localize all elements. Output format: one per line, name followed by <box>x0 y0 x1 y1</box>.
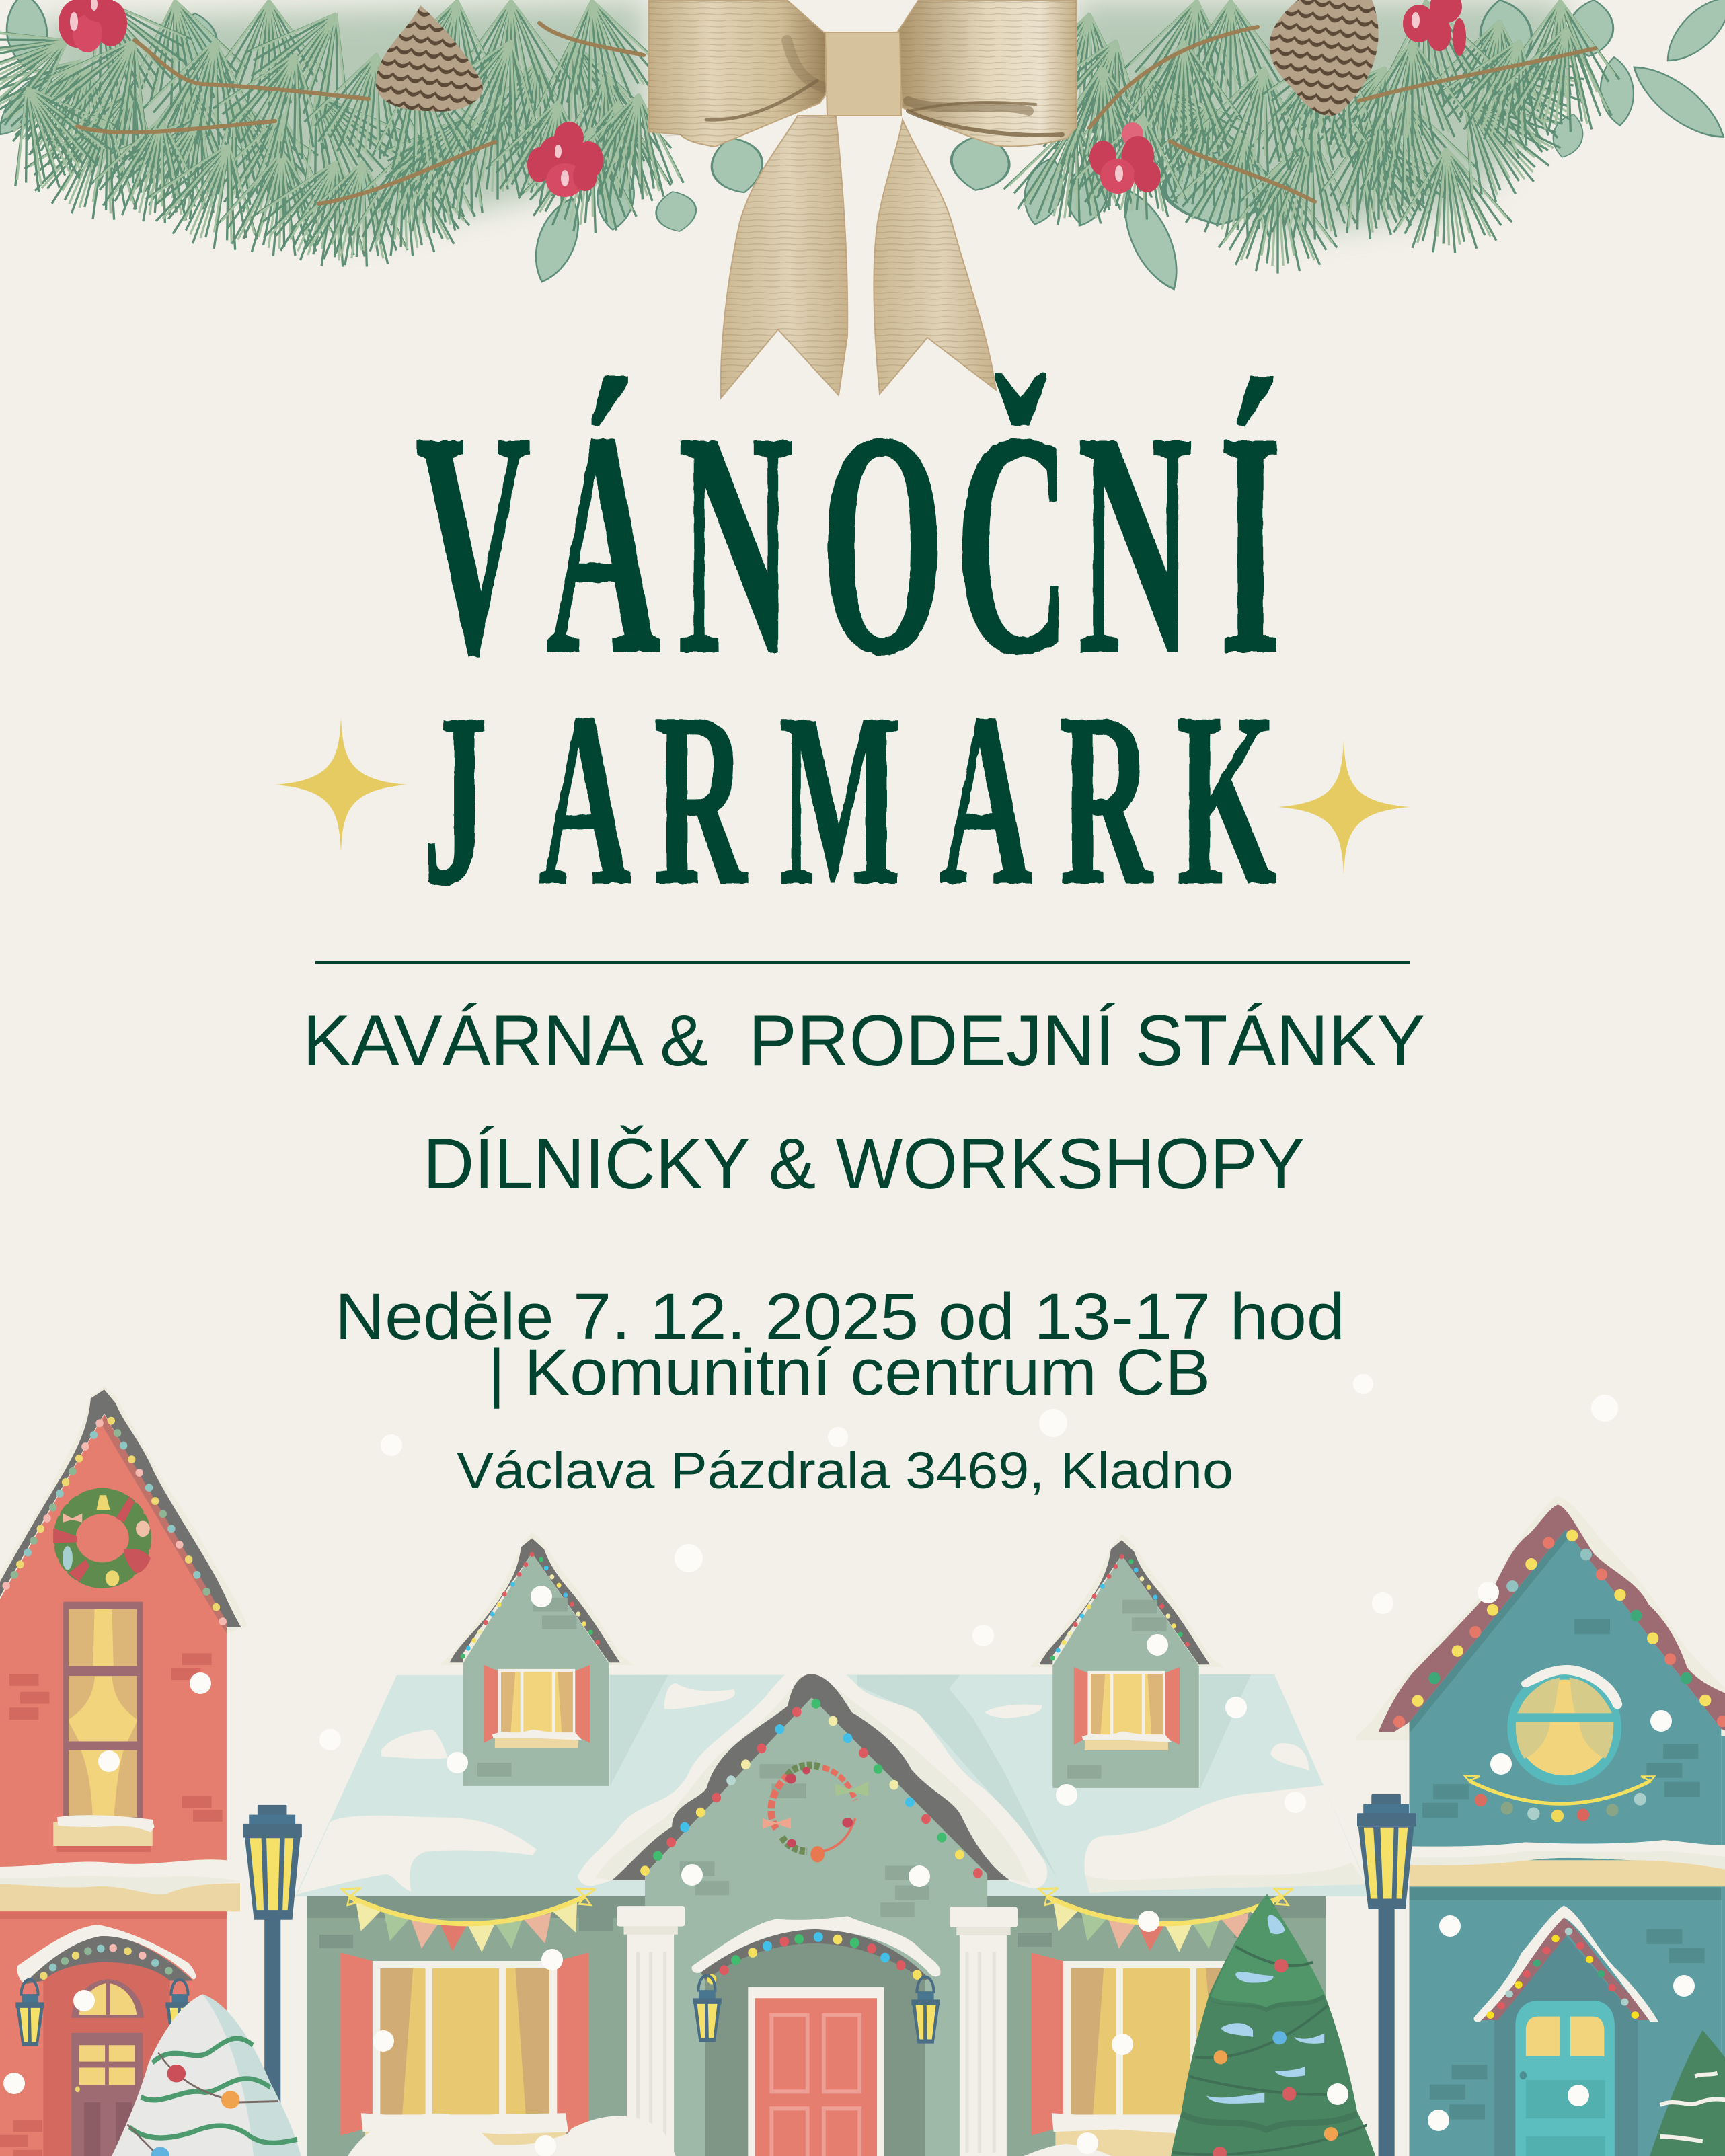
pine cone right <box>1270 0 1379 116</box>
teal door <box>1515 2001 1615 2156</box>
roof snow patches <box>297 1683 1367 1894</box>
subheading line 1: KAVÁRNA & PRODEJNÍ STÁNKY <box>303 1000 1425 1081</box>
ledge with snow <box>0 1859 242 1919</box>
red house <box>0 1386 247 2156</box>
wreath <box>53 1492 151 1586</box>
lantern on red house left <box>15 1980 44 2046</box>
lantern on red house right <box>165 1980 194 2046</box>
small christmas tree <box>1645 2030 1725 2156</box>
garland with bow <box>0 0 1725 398</box>
columns <box>617 1906 1018 2156</box>
porch lantern right <box>911 1977 940 2044</box>
gable grey roof band <box>612 1674 1009 1880</box>
window right <box>1031 1952 1279 2156</box>
dormer left <box>440 1532 634 1786</box>
falling snowflakes <box>3 1374 1695 2156</box>
porch roof band <box>701 1929 929 1980</box>
divider <box>315 961 1410 964</box>
round window <box>1512 1665 1622 1781</box>
entrance roof band <box>24 1935 193 1985</box>
bow tails <box>721 116 996 398</box>
dormer right <box>1030 1534 1224 1788</box>
wall <box>0 1414 227 2156</box>
gable wall <box>645 1697 987 2156</box>
bow right loop <box>896 0 1076 147</box>
bow left loop <box>649 0 825 147</box>
grey roof band <box>0 1389 241 1627</box>
snowy tree <box>104 1994 305 2156</box>
title line 1: VÁNOČNÍ <box>416 367 1281 721</box>
bow knot <box>825 32 901 116</box>
roof shading <box>610 1675 1056 1876</box>
lights <box>1393 1530 1725 1728</box>
berries centre right <box>1089 122 1161 194</box>
roof snow halo <box>0 1386 247 1634</box>
bow fabric grain <box>649 0 1076 147</box>
maroon roof band <box>1379 1505 1725 1736</box>
lower wall <box>307 1896 1326 2156</box>
ornament string <box>1465 1775 1654 1822</box>
big christmas tree <box>1170 1894 1377 2156</box>
tall window <box>53 1602 155 1852</box>
gable bricks <box>680 1764 929 1917</box>
main house <box>295 1532 1373 2156</box>
entrance recess <box>43 1957 170 2156</box>
front door <box>748 1987 884 2156</box>
window left <box>340 1952 588 2156</box>
wall bricks <box>319 1918 1268 1948</box>
address line: Václava Pázdrala 3469, Kladno <box>457 1442 1233 1500</box>
lamp post right <box>1357 1794 1416 2156</box>
date line: Neděle 7. 12. 2025 od 13-17 hod <box>335 1280 1345 1353</box>
gable snow <box>578 1660 1047 1888</box>
venue line: | Komunitní centrum CB <box>488 1336 1211 1409</box>
snow halo <box>1356 1496 1725 1740</box>
ground snow drifts <box>348 2114 1112 2156</box>
star right <box>1278 740 1410 874</box>
main roof <box>295 1674 1373 1896</box>
eucalyptus leaves <box>0 0 1725 297</box>
entrance lights <box>40 1944 173 1980</box>
subheading line 2: DÍLNIČKY & WORKSHOPY <box>423 1123 1305 1204</box>
centre gable <box>578 1660 1047 2156</box>
porch <box>1473 1906 1658 2156</box>
bunting right <box>1039 1888 1293 1952</box>
pine needles left <box>0 0 697 280</box>
teal house <box>1356 1496 1725 2156</box>
walls <box>1410 1530 1721 2156</box>
berries centre left <box>527 122 603 197</box>
red door <box>71 2033 143 2156</box>
porch lights <box>707 1932 922 1985</box>
title line 2: JARMARK <box>423 663 1277 936</box>
gable wreath <box>763 1765 868 1862</box>
porch snow <box>692 1916 940 1976</box>
pine needles right <box>999 0 1625 274</box>
twigs <box>77 23 1595 204</box>
berries top left <box>59 0 127 52</box>
soft foliage tone <box>40 0 1567 235</box>
lamp post left <box>243 1805 302 2156</box>
gable lights <box>640 1699 983 1878</box>
door alcove <box>705 1943 925 2156</box>
arched window <box>71 1979 144 2018</box>
bow fold shading <box>706 40 1063 135</box>
entrance snow <box>17 1925 196 1985</box>
bunting left <box>342 1888 596 1952</box>
ledge and snow <box>1410 1840 1725 1900</box>
bricks <box>1422 1619 1705 2119</box>
berries top right <box>1403 0 1466 56</box>
star left <box>275 718 408 851</box>
porch lantern left <box>693 1976 722 2042</box>
bricks <box>0 1653 223 2156</box>
pine cone left <box>375 5 483 112</box>
lights <box>2 1417 227 1625</box>
